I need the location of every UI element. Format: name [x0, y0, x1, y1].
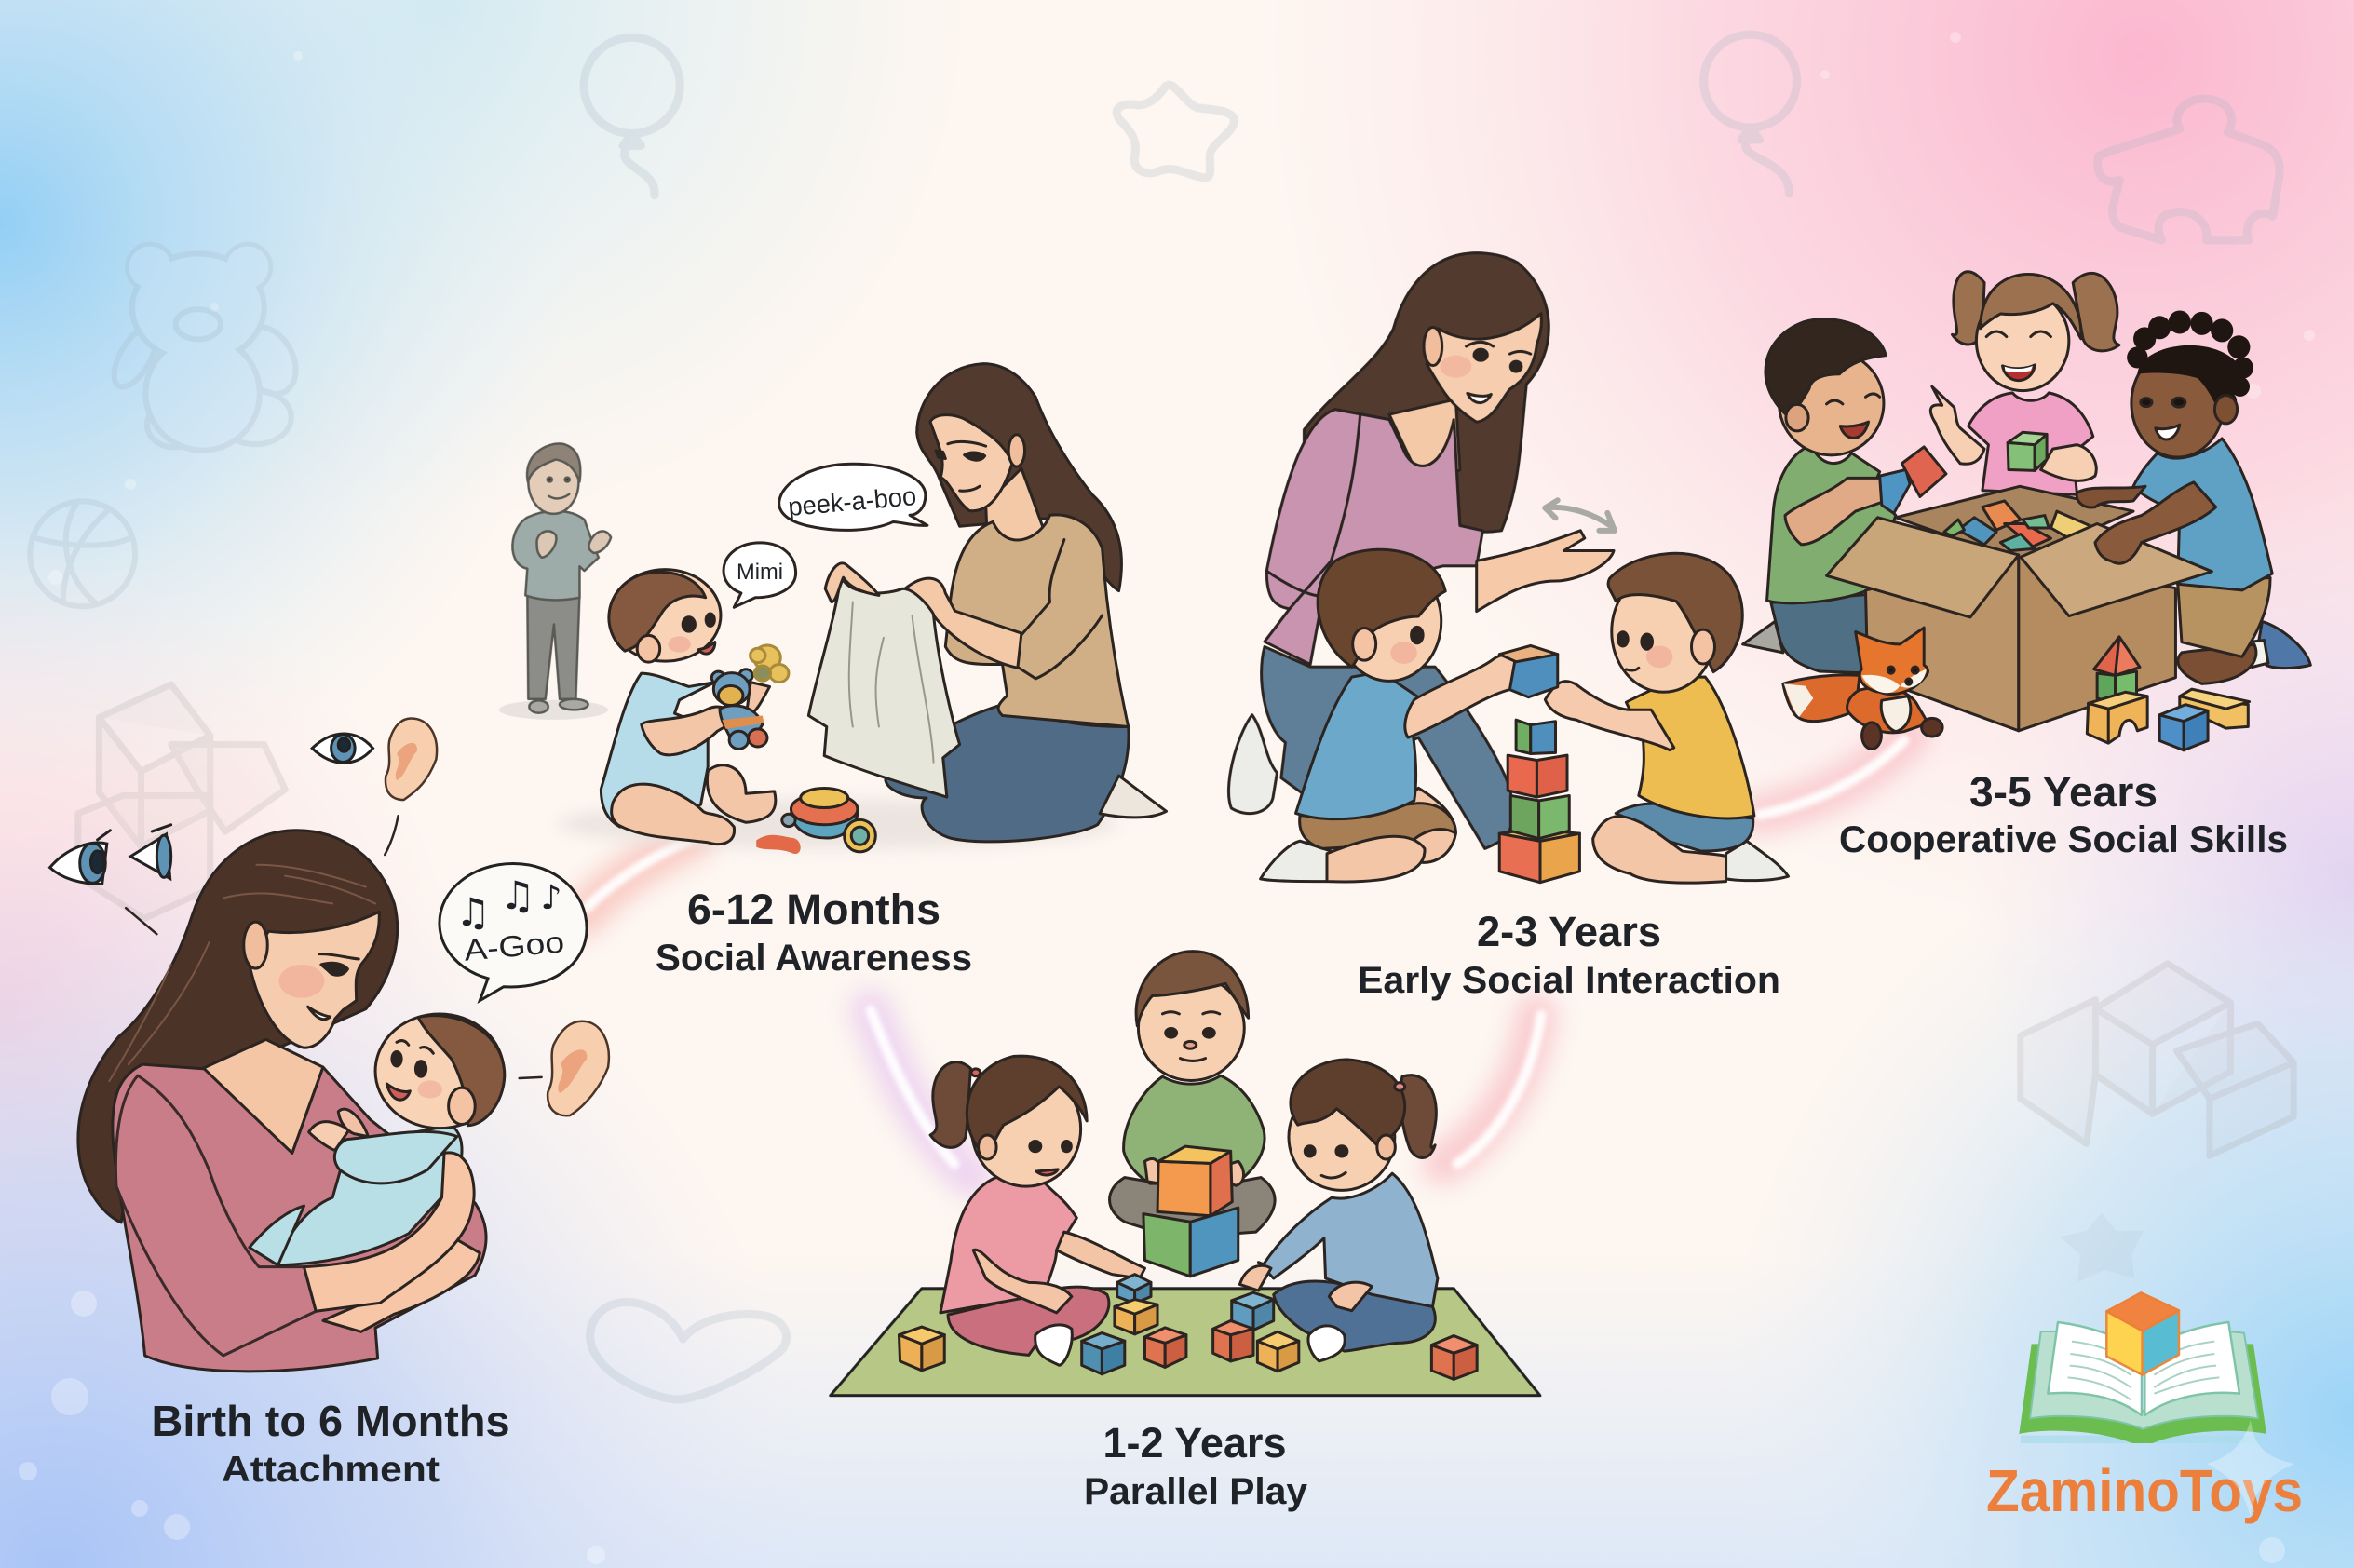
illustration: mat blocks [899, 1275, 1477, 1379]
subheading: Social Awareness: Social Awareness [656, 938, 972, 979]
heading: 1-2 Years: 1-2 Years [1103, 1419, 1287, 1467]
speech bubble shapes [779, 464, 927, 530]
icon: two-way arrow [1545, 500, 1615, 531]
icon: blocks left [78, 684, 285, 919]
heading: 2-3 Years: 2-3 Years [1477, 908, 1661, 955]
illustration: right boy [1545, 553, 1788, 883]
block stack [1143, 1146, 1238, 1277]
illustration: cardboard box [1827, 482, 2216, 731]
speech bubble: A-Goo: ♫ [455, 889, 491, 935]
illustration: left boy [1261, 549, 1526, 882]
panel: birth to 6 months [50, 718, 609, 1490]
illustration: baby with toys [601, 570, 875, 854]
illustration: play mat [831, 1289, 1540, 1396]
toy: bear [711, 669, 767, 749]
subheading: Attachment: Attachment [222, 1450, 440, 1490]
illustration: center child with blocks [1110, 952, 1275, 1277]
illustration: girl in pink [1930, 272, 2119, 494]
brand name: ZaminoToys [1986, 1457, 2303, 1524]
logo: ZaminoToys [1986, 1292, 2303, 1524]
toy: rattle [751, 645, 789, 683]
illustration: mother with blanket [724, 364, 1167, 842]
panel: 1-2 years [831, 952, 1540, 1512]
illustration: mother holding baby [78, 831, 505, 1372]
icon: blocks right [2021, 964, 2293, 1156]
floor shadow [559, 800, 1117, 848]
icon: puzzle piece [2098, 99, 2280, 240]
icon: balloon left [584, 37, 680, 196]
speech bubble: A-Goo: ♪ [541, 879, 561, 917]
speech label: Mimi: Mimi [737, 560, 783, 585]
icon: ball [30, 501, 135, 606]
developmental path ribbons [582, 736, 1909, 1178]
illustration: boy in green [1743, 319, 1946, 673]
icon: heart [590, 1302, 787, 1399]
panel: 3-5 years [1743, 272, 2310, 860]
speech bubble: A-Goo: A-Goo [463, 925, 565, 967]
subheading: Early Social Interaction: Early Social Interaction [1358, 960, 1780, 1001]
icon: star lower right [2060, 1212, 2144, 1282]
heading: Birth to 6 Months: Birth to 6 Months [151, 1397, 510, 1445]
illustration: boy in blue [2077, 310, 2310, 683]
icon: balloon right [1704, 34, 1797, 194]
green cube [2008, 432, 2047, 470]
illustration: standing father [499, 443, 611, 720]
icon: ear lower [548, 1021, 609, 1115]
illustration: floor blocks [2087, 637, 2250, 750]
curly hair [2127, 310, 2253, 411]
panel: 6-12 months [499, 364, 1167, 979]
icon: teddy bear [105, 245, 307, 451]
heading: 3-5 Years: 3-5 Years [1969, 768, 2158, 816]
illustration: right girl [1239, 1060, 1438, 1361]
panel: 2-3 years [1228, 253, 1788, 1001]
sparkle star [2207, 1420, 2294, 1518]
speech bubble: A-Goo [440, 864, 587, 1001]
illustration: block tower [1499, 645, 1579, 883]
subheading: Cooperative Social Skills: Cooperative Social Skills [1839, 819, 2288, 860]
illustration: left girl [930, 1056, 1144, 1365]
illustration: stuffed fox [1783, 628, 1942, 749]
icon: eye upper [312, 734, 373, 763]
icon: star top [1116, 85, 1234, 178]
subheading: Parallel Play: Parallel Play [1084, 1471, 1308, 1512]
illustration: mother guiding [1228, 253, 1614, 848]
icon: open book with cube [2019, 1292, 2266, 1443]
toy: stacking wheel [756, 788, 875, 854]
icon: ear upper [386, 718, 437, 800]
speech bubble: A-Goo: ♫ [500, 872, 535, 918]
hand on box [2095, 482, 2216, 563]
speech label: peek-a-boo: peek-a-boo [787, 481, 917, 521]
illustration: box interior [1896, 486, 2133, 561]
icon: pair of eyes [50, 825, 171, 885]
connector dashes [126, 816, 542, 1078]
heading: 6-12 Months: 6-12 Months [687, 885, 940, 933]
